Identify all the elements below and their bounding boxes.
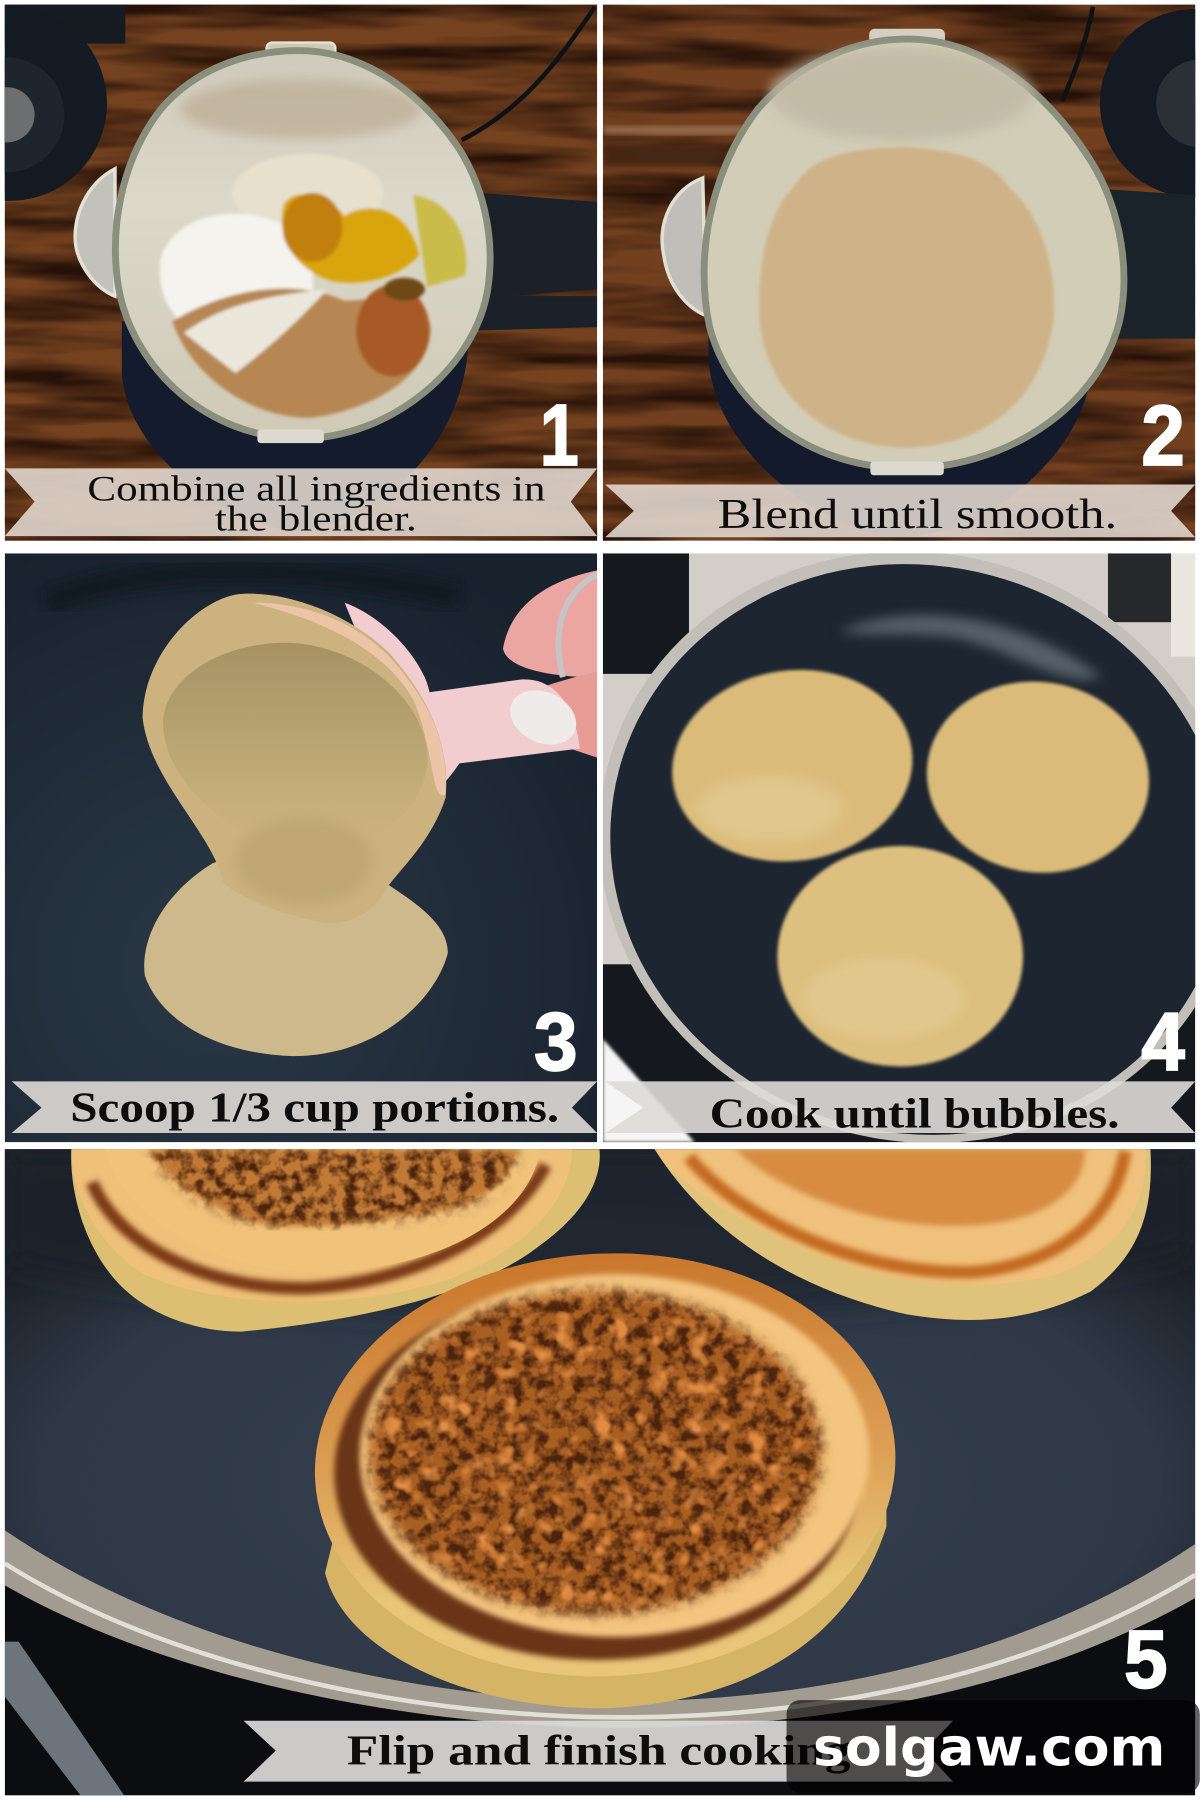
panel: step 5 flip [5, 1149, 1195, 1795]
panel: step 2 blend [603, 5, 1200, 541]
cord [1062, 7, 1093, 101]
batter [759, 147, 1054, 448]
ribbon caption 1 [5, 468, 597, 538]
ingredients [160, 154, 466, 418]
pan background [5, 553, 597, 1142]
front pancake [304, 1239, 906, 1708]
icon: blender lid [1100, 9, 1200, 197]
ribbon caption 1: the blender. [215, 498, 417, 538]
ribbon caption 4: Cook until bubbles. [710, 1090, 1119, 1137]
panel: step 1 combine ingredients [0, 5, 597, 541]
ribbon caption 5 [244, 1721, 953, 1782]
pan handle strip [5, 1642, 124, 1795]
watermark [787, 1700, 1200, 1793]
ribbon caption 4 [605, 1081, 1195, 1137]
pancake batter rounds [660, 655, 1161, 1066]
wood background [5, 5, 597, 541]
icon: blender lid [0, 5, 125, 201]
glass jar [662, 29, 1124, 475]
step number 1: 1 [540, 387, 579, 484]
ribbon caption 3: Scoop 1/3 cup portions. [70, 1085, 559, 1132]
frying pan [602, 553, 1196, 1142]
blender base [122, 321, 469, 530]
pan rim [5, 1530, 1195, 1728]
ribbon caption 3 [12, 1081, 597, 1133]
stove background [603, 553, 1195, 1142]
hand [503, 571, 597, 758]
step number 4: 4 [1141, 995, 1185, 1088]
ribbon caption 2: Blend until smooth. [718, 491, 1117, 538]
panel: step 3 scoop [5, 553, 597, 1142]
pan background [5, 1149, 1195, 1795]
poured batter [143, 594, 448, 1056]
blender handle [471, 193, 597, 331]
step number 3: 3 [534, 995, 578, 1088]
back left pancake [71, 1149, 600, 1332]
step number 2: 2 [1141, 388, 1185, 483]
wood background [603, 5, 1195, 541]
watermark: solgaw.com [813, 1718, 1165, 1779]
step number 5: 5 [1124, 1613, 1168, 1706]
blender handle [1108, 189, 1195, 339]
back right pancake [655, 1149, 1151, 1320]
panel: step 4 cook [602, 553, 1196, 1142]
blender base [708, 321, 1093, 537]
glass jar [75, 42, 490, 443]
ribbon caption 5: Flip and finish cooking. [347, 1727, 863, 1774]
cord [462, 7, 595, 140]
ribbon caption 2 [605, 484, 1195, 538]
measuring cup [344, 602, 580, 781]
ribbon caption 1: Combine all ingredients in [87, 469, 546, 509]
